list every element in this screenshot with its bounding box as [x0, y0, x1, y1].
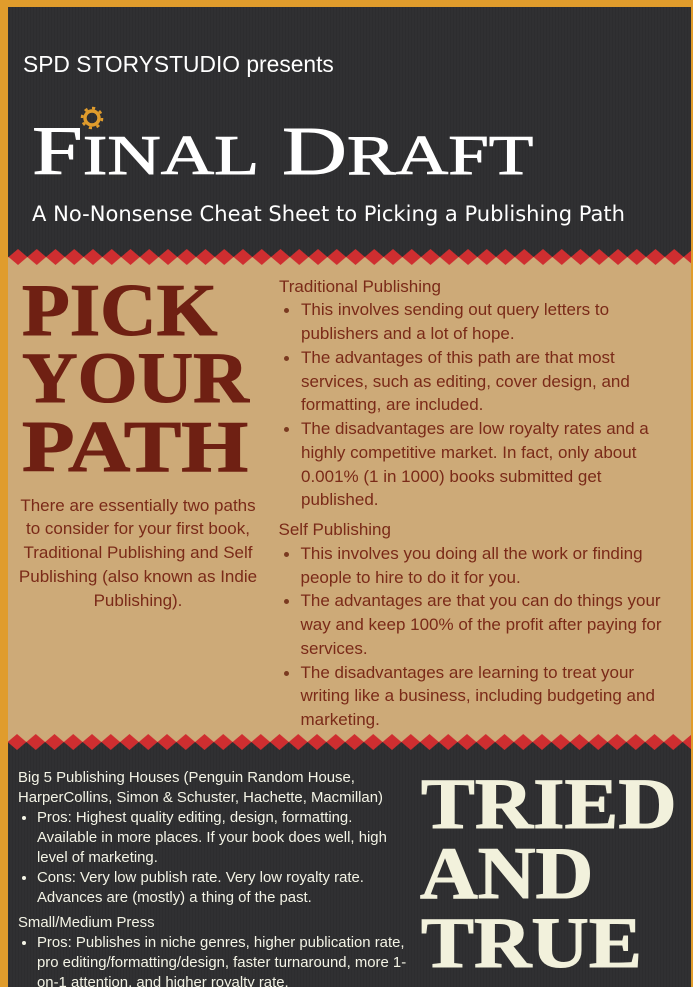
text block: traditional publishing: formatting, are included.: [301, 395, 483, 414]
text block: self publishing: marketing.: [300, 710, 380, 729]
text block: traditional publishing: published.: [301, 490, 379, 509]
text block: big 5 publishing houses: level of marketing.: [37, 850, 158, 866]
text block: self publishing: writing like a business, including budgeting and: [300, 686, 655, 705]
subtitle: A No-Nonsense Cheat Sheet to Picking a Publishing Path: [32, 202, 625, 226]
text block: traditional publishing: 0.001% (1 in 1000) books submitted get: [301, 466, 602, 486]
heading: Tried and True: AND: [420, 831, 593, 914]
text block: self publishing: This involves you doing all the work or finding: [300, 544, 643, 563]
text block: small/medium press: Pros: Publishes in niche genres, higher publication rate,: [37, 935, 405, 951]
text block: traditional publishing: services, such as editing, cover design, and: [301, 372, 630, 390]
text block: big 5 publishing houses: Cons: Very low publish rate. Very low royalty rate.: [37, 870, 364, 886]
text block: big 5 publishing houses: Available in more places. If your book does well, high: [37, 830, 387, 846]
text block: big 5 publishing houses: Big 5 Publishing Houses (Penguin Random House,: [18, 770, 355, 786]
text block: self publishing: services.: [300, 639, 368, 658]
intro paragraph: [19, 496, 257, 610]
icon: gear: [80, 106, 104, 130]
text block: big 5 publishing houses: HarperCollins, Simon & Schuster, Hachette, Macmillan): [18, 790, 383, 806]
text block: self publishing: way and keep 100% of the profit after paying for: [300, 615, 662, 634]
intro paragraph: Publishing).: [94, 590, 182, 610]
intro paragraph: Publishing (also known as Indie: [19, 567, 257, 586]
text block: self publishing: The disadvantages are learning to treat your: [300, 662, 634, 682]
heading: Pick Your Path: [22, 272, 250, 484]
text block: self publishing: Self Publishing: [278, 520, 391, 539]
text block: traditional publishing: This involves sending out query letters to: [301, 300, 609, 319]
text block: traditional publishing: [279, 276, 649, 509]
title: Final Draft: [32, 112, 533, 190]
presenter line: SPD STORYSTUDIO presents: [23, 51, 334, 77]
text block: traditional publishing: The disadvantages are low royalty rates and a: [301, 419, 649, 438]
text block: small/medium press: [18, 915, 406, 987]
text block: self publishing: The advantages are that you can do things your: [300, 591, 661, 610]
text block: small/medium press: pro editing/formatting/design, faster turnaround, more 1-: [37, 955, 406, 971]
intro paragraph: Traditional Publishing and Self: [23, 543, 252, 562]
text block: small/medium press: Small/Medium Press: [18, 915, 155, 931]
text block: big 5 publishing houses: [18, 770, 387, 906]
title: Final Draft: DRAFT: [282, 113, 533, 190]
heading: Pick Your Path: YOUR: [22, 339, 250, 418]
text block: big 5 publishing houses: Advances are (mostly) a thing of the past.: [37, 890, 312, 906]
text block: traditional publishing: Traditional Publishing: [279, 276, 441, 296]
text block: self publishing: people to hire to do it for you.: [300, 568, 521, 586]
text block: traditional publishing: publishers and a lot of hope.: [301, 324, 515, 343]
text block: big 5 publishing houses: Pros: Highest quality editing, design, formatting.: [37, 810, 352, 826]
heading: Tried and True: [420, 768, 677, 980]
intro paragraph: to consider for your first book,: [26, 519, 250, 538]
text block: traditional publishing: The advantages of this path are that most: [301, 348, 615, 367]
intro paragraph: There are essentially two paths: [20, 496, 256, 514]
text block: self publishing: [278, 520, 662, 729]
text block: traditional publishing: highly competitive market. In fact, only about: [301, 443, 636, 462]
title: Final Draft: FINAL: [32, 112, 259, 189]
